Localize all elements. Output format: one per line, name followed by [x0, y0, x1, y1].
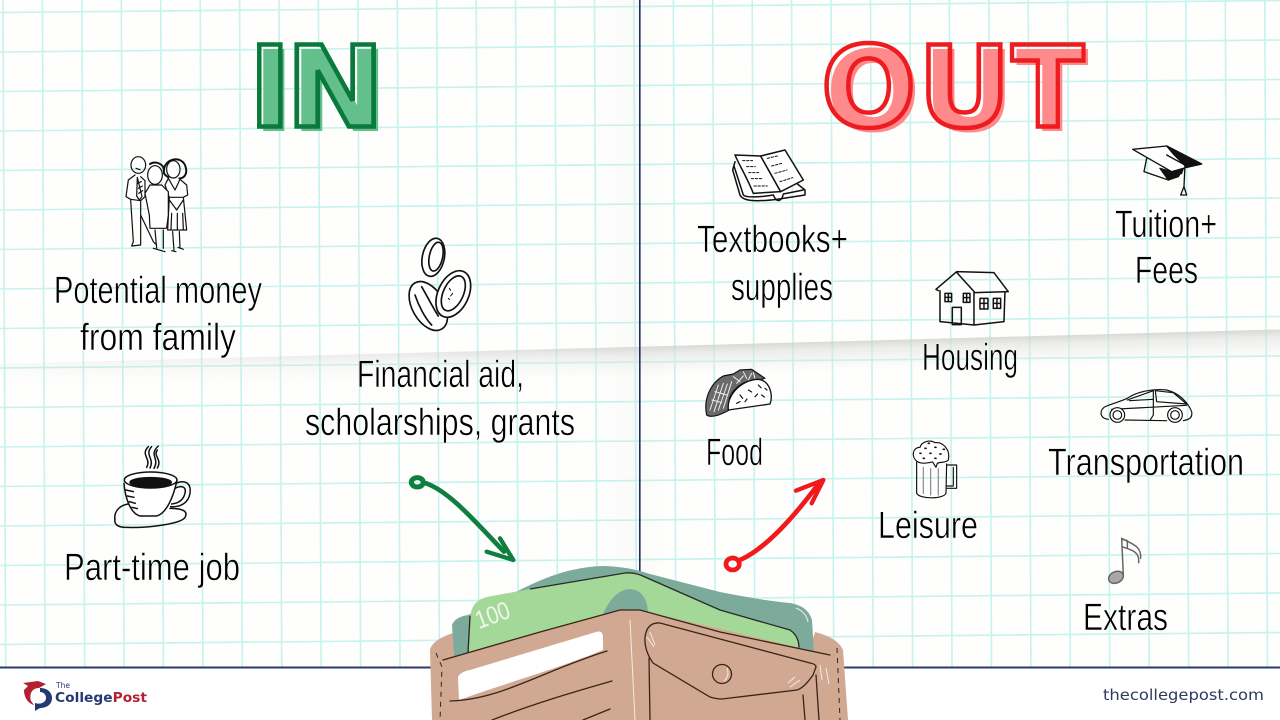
heading: OUT: T	[1012, 23, 1084, 153]
label: tuition + fees	[1115, 204, 1217, 292]
label: financial aid, scholarships, grants	[305, 354, 575, 444]
wallet front	[432, 610, 848, 720]
label: leisure: Leisure	[878, 505, 978, 547]
logo: The College Post: College Post	[55, 691, 147, 706]
icon: car	[1101, 390, 1192, 422]
icon: open book	[733, 150, 805, 201]
label: textbooks + supplies	[697, 219, 848, 309]
icon: graduation cap	[1133, 146, 1202, 195]
icon: coins	[401, 236, 478, 337]
shadow blob	[603, 589, 648, 614]
label: financial aid, scholarships, grants: Financial aid,	[357, 354, 524, 396]
heading: OUT: T	[1016, 27, 1089, 158]
icon: beer mug	[913, 441, 957, 498]
logo: The College Post: The	[55, 681, 70, 690]
arrow: green into wallet	[411, 478, 513, 560]
label: textbooks + supplies: Textbooks+	[697, 219, 848, 261]
label: financial aid, scholarships, grants: scholarships, grants	[305, 402, 575, 444]
heading: OUT: U	[922, 27, 1015, 158]
bill lines	[468, 573, 799, 652]
label: part-time job: Part-time job	[64, 547, 240, 589]
label: tuition + fees: Fees	[1135, 250, 1198, 292]
heading: IN: N	[290, 28, 389, 158]
icon: house	[936, 272, 1008, 325]
label: food: Food	[706, 432, 763, 474]
label: potential money from family: from family	[80, 317, 236, 359]
heading: IN: I	[253, 28, 295, 158]
flap button	[712, 664, 732, 684]
icon: family	[126, 157, 188, 252]
white card	[458, 632, 603, 700]
label: housing: Housing	[922, 337, 1018, 379]
wallet lines	[443, 610, 830, 720]
label: textbooks + supplies: supplies	[731, 267, 833, 309]
label: tuition + fees: Tuition+	[1115, 204, 1217, 246]
heading: IN: N	[286, 23, 384, 154]
front bill	[468, 573, 799, 670]
center divider line	[639, 0, 641, 580]
heading: IN: I	[249, 24, 291, 154]
icon: taco	[706, 369, 771, 416]
heading: OUT	[821, 23, 1089, 158]
back bill	[452, 566, 815, 670]
bill value: 100	[471, 596, 514, 635]
wallet flap	[645, 623, 816, 699]
logo: The College Post	[23, 681, 147, 711]
icon: music note	[1107, 538, 1141, 586]
heading: IN	[249, 23, 389, 158]
icon: coffee cup	[115, 446, 190, 527]
label: extras: Extras	[1083, 597, 1168, 639]
arrow: red out of wallet	[726, 480, 823, 570]
footer	[0, 666, 1280, 720]
label: potential money from family: Potential money	[54, 270, 262, 312]
illustration: wallet with cash	[430, 566, 848, 720]
heading: OUT: U	[918, 23, 1011, 153]
logo mark	[23, 681, 52, 711]
footer url: thecollegepost.com	[1103, 686, 1264, 704]
heading: OUT: O	[821, 24, 916, 154]
wallet back panels	[430, 632, 848, 720]
heading: OUT: O	[826, 28, 921, 158]
highlights and stitching	[630, 608, 829, 720]
label: potential money from family	[54, 270, 262, 359]
